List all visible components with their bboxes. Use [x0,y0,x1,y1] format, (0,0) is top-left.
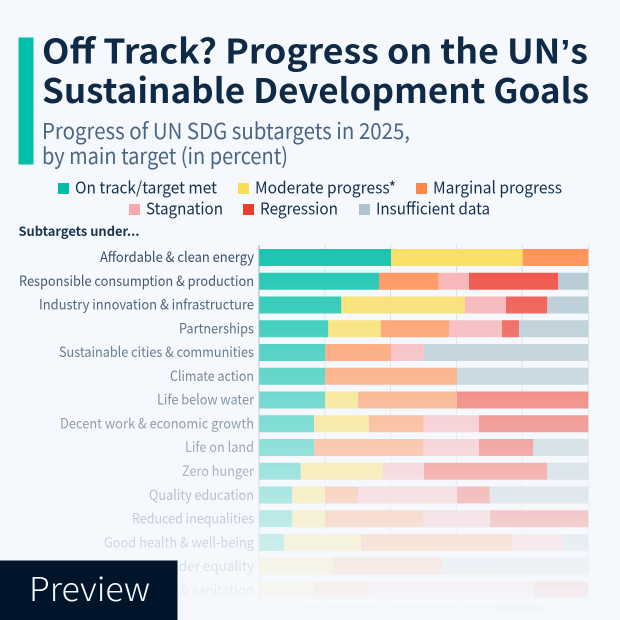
category labels [19,247,255,620]
preview badge [0,560,178,620]
axis heading: Subtargets under... [18,221,140,240]
category labels: Climate action [170,366,254,386]
bar: Zero hunger [259,463,588,480]
bar: Life below water [259,392,588,408]
category labels: Clean water & sanitation [104,580,254,600]
fade overlay [0,208,620,620]
category labels: Life below water [157,390,255,410]
category labels: Industry innovation & infrastructure [39,294,254,314]
title: Off Track? Progress on the UN ’s [42,24,588,74]
stacked bars [259,249,588,620]
legend item: Insufficient data: Insufficient data [376,196,490,220]
category labels: Affordable & clean energy [100,247,255,267]
bar: Life on land [259,439,588,456]
category labels: Reduced inequalities [132,508,254,528]
bar: Decent work & economic growth [259,415,588,432]
bar: Affordable & clean energy [259,249,588,266]
bar: Reduced inequalities [259,510,588,527]
legend item: Moderate progress: Moderate progress* [255,174,396,198]
category labels: Decent work & economic growth [60,414,254,434]
subtitle: Progress of UN SDG subtargets in 2025, [42,114,410,146]
chart: gridlines, labels and stacked bars [19,245,588,620]
title [42,24,589,113]
legend item: Marginal progress: Marginal progress [433,174,562,198]
legend item: Stagnation: Stagnation [146,196,223,220]
bar: Industry innovation & infrastructure [259,296,588,314]
category labels: Gender equality [154,556,255,576]
category labels: Life on land [185,437,254,457]
bar: Sustainable cities & communities [259,344,588,361]
legend item: Regression: Regression [260,196,338,220]
title: Sustainable Development Goals [42,64,589,113]
subtitle [42,114,410,171]
legend [58,174,562,220]
legend item: On track/target met: On track/target met [75,174,217,198]
bar: Good health & well-being [259,534,588,551]
bar: No poverty [259,605,588,620]
accent bar [18,38,34,164]
category labels: Sustainable cities & communities [59,342,254,362]
bar: Gender equality [259,558,588,575]
bar: Quality education [259,486,588,504]
category labels: Responsible consumption & production [19,271,254,291]
subtitle: by main target (in percent) [42,139,288,171]
bar: Responsible consumption & production [259,273,588,290]
bar: Partnerships [259,320,588,337]
category labels: Partnerships [179,318,254,338]
category labels: Quality education [149,485,254,505]
category labels: Zero hunger [182,461,255,481]
bar: Climate action [259,368,588,385]
category labels: Good health & well-being [104,532,254,552]
preview badge: Preview [29,563,150,611]
bar: Clean water & sanitation [259,582,588,598]
